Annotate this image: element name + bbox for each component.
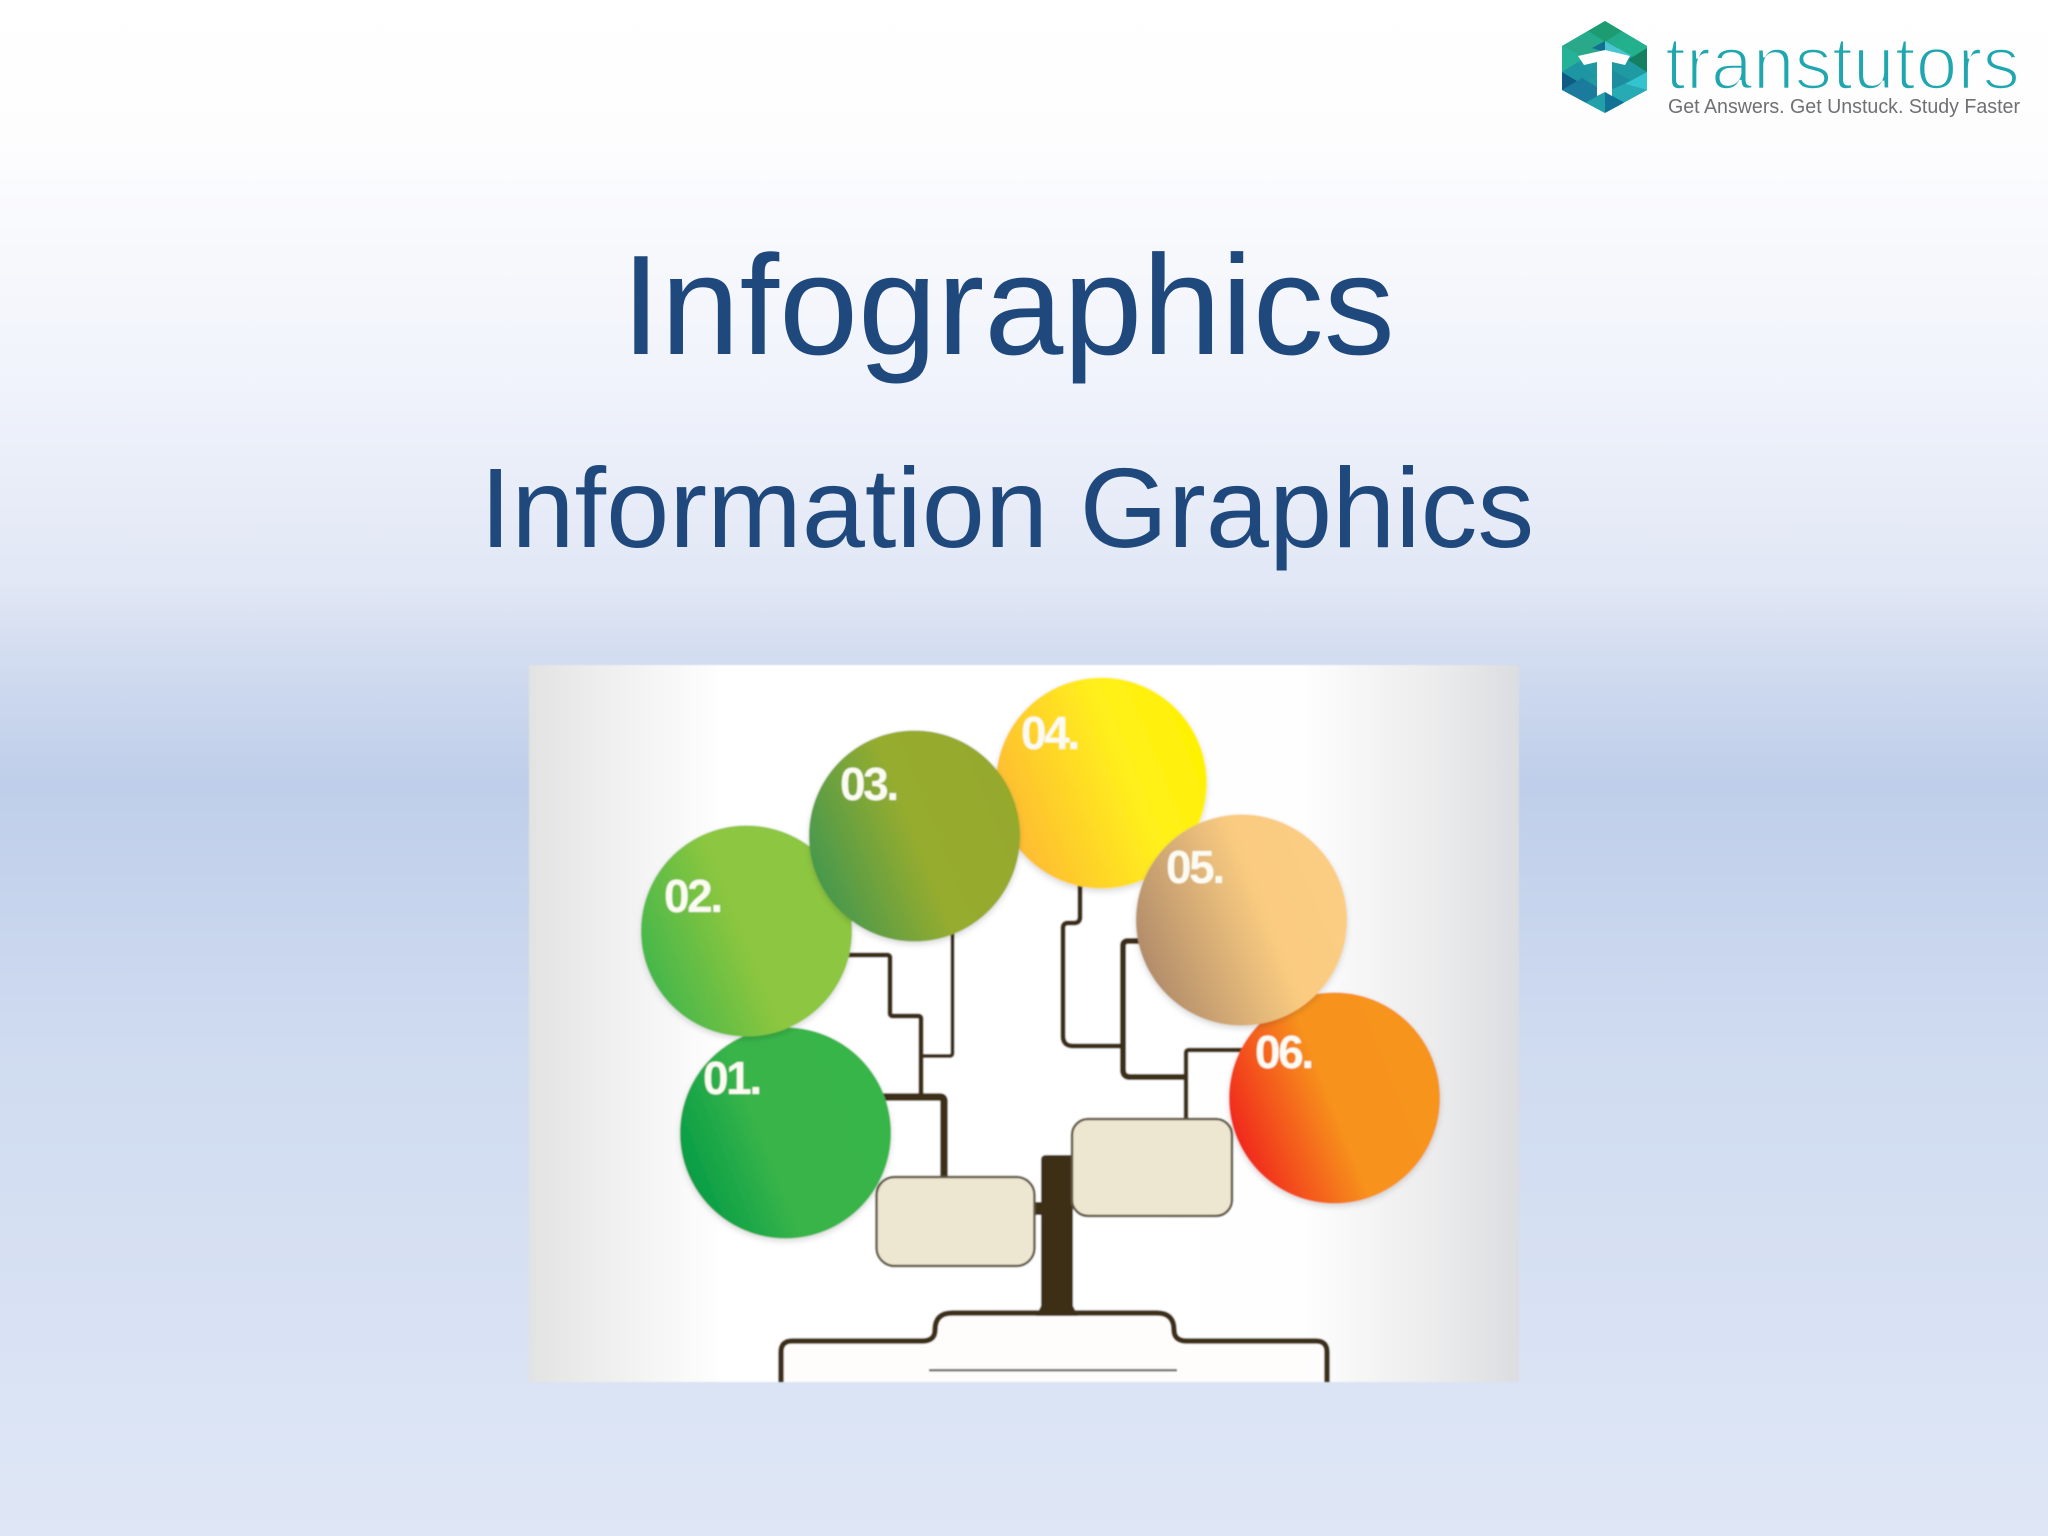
branch: 01 to left box [880,1097,944,1178]
circle 06 [1229,992,1440,1204]
label 03: 03. [840,758,897,810]
label 05: 05. [1166,841,1223,893]
right beige box [1072,1119,1232,1216]
branch: 05 [1123,941,1186,1077]
tree base outline [781,1313,1327,1390]
branch: 03 [921,930,952,1056]
logo: transtutors [1560,20,2020,118]
subtitle: Information Graphics [480,445,1534,572]
label 04: 04. [1021,707,1078,759]
left beige box [876,1177,1034,1266]
branch: 04 [1063,880,1123,1046]
wordmark: transtutors [1665,21,2020,105]
left box connector [1033,1202,1045,1215]
branch: 06 [1186,1050,1245,1120]
circle 02 [641,826,852,1036]
tree trunk [1036,1155,1078,1316]
circle 03 [809,730,1020,942]
label 02: 02. [664,870,721,922]
circle 01 [680,1028,891,1238]
branch: 02 [845,955,921,1097]
picture background [529,665,1519,1382]
picture: six-branch tree infographic [529,665,1519,1390]
circle 05 [1136,814,1347,1026]
circle 04 [996,678,1207,888]
icon: hexagon T mark [1560,20,1650,115]
tagline: Get Answers. Get Unstuck. Study Faster [1668,96,2020,118]
title: Infographics [621,226,1395,385]
icon: white T [1578,50,1630,96]
label 01: 01. [703,1052,760,1104]
label 06: 06. [1255,1026,1312,1078]
